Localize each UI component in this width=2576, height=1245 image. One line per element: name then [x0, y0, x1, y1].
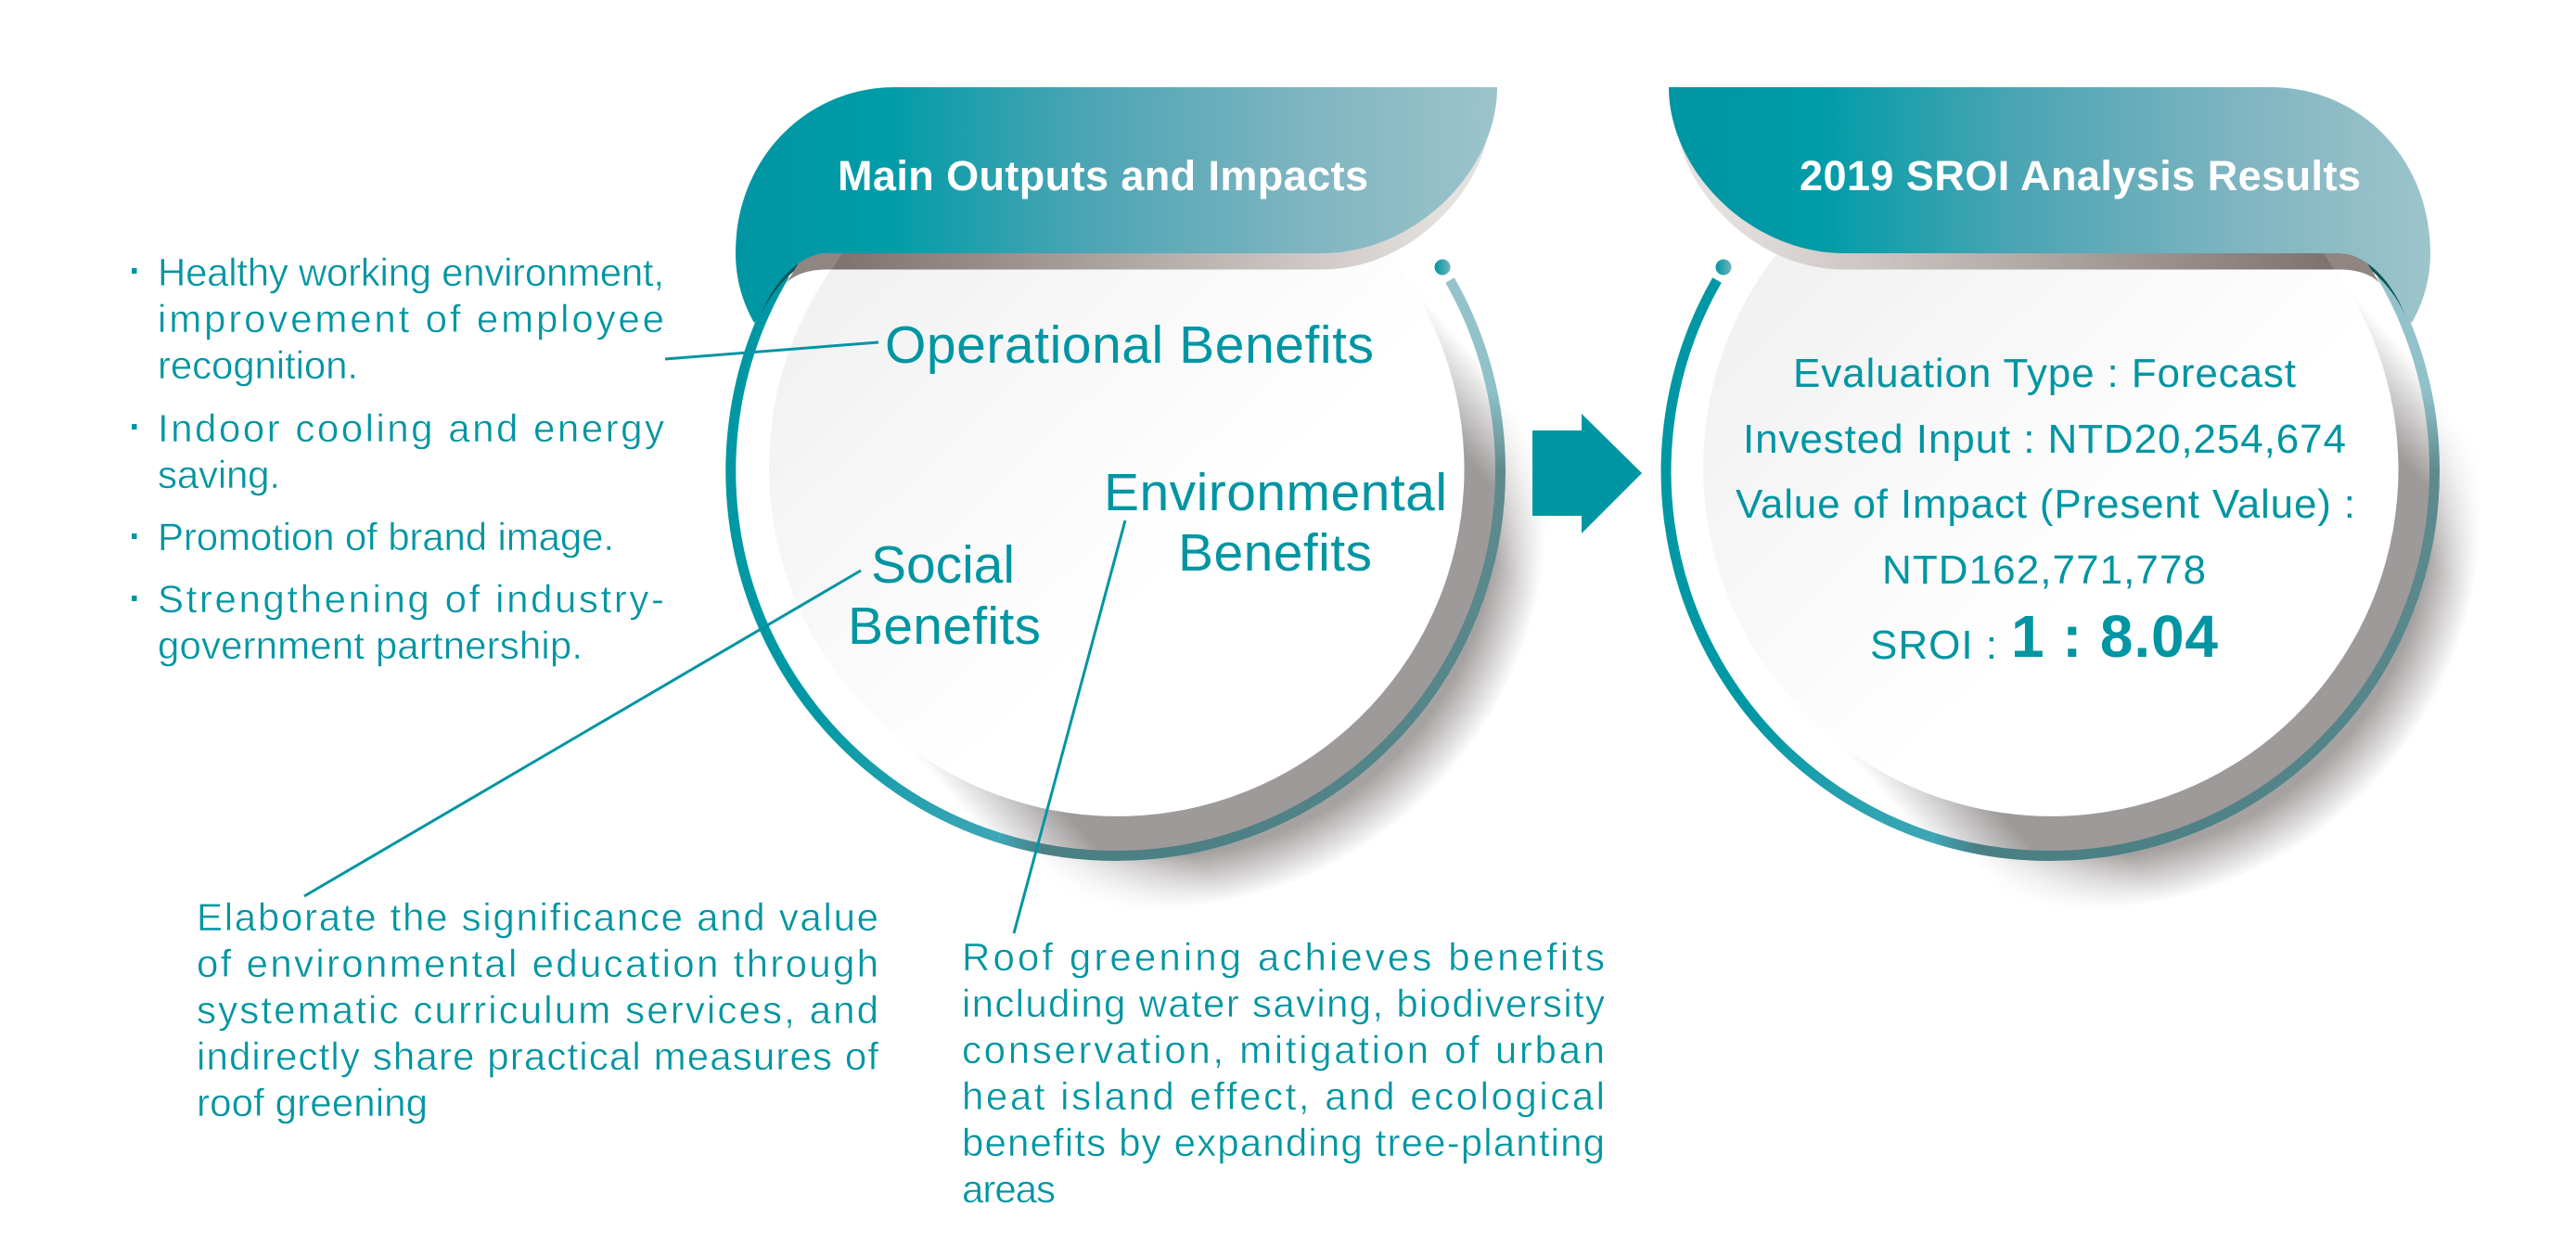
white disc	[1703, 121, 2397, 815]
bullets	[132, 268, 137, 601]
heading: operational benefits: Operational Benefits	[885, 315, 1374, 375]
text block: social benefits description: Elaborate the significance and value	[197, 895, 878, 939]
banner title: 2019 SROI Analysis Results	[1800, 152, 2361, 199]
banner	[1669, 87, 2430, 323]
text block: operational benefits list: recognition.	[158, 343, 358, 387]
text block: environmental benefits description: benefits by expanding tree-planting	[962, 1121, 1605, 1164]
text block: environmental benefits description: areas	[962, 1167, 1056, 1211]
leader line: operational benefits	[665, 342, 878, 359]
ring end dot	[1716, 260, 1731, 275]
banner title: Main Outputs and Impacts	[838, 152, 1368, 199]
results text: SROI :	[1870, 622, 1997, 668]
panel: 2019 SROI analysis results	[1660, 82, 2481, 909]
heading: social benefits: Benefits	[848, 597, 1041, 656]
text block: operational benefits list: Healthy working environment,	[158, 250, 664, 294]
heading: environmental benefits: Environmental	[1104, 463, 1447, 522]
ring	[731, 275, 1501, 856]
panel: main outputs and impacts	[726, 82, 1547, 909]
text block: social benefits description: indirectly share practical measures of	[197, 1034, 878, 1078]
ring end dot	[1434, 260, 1451, 275]
results text: NTD162,771,778	[1882, 547, 2206, 593]
leader line: environmental benefits	[1014, 520, 1125, 933]
text block: operational benefits list: Strengthening of industry-	[158, 577, 664, 621]
text block: social benefits description: roof greening	[197, 1081, 428, 1124]
heading: social benefits	[848, 535, 1041, 656]
ring	[1666, 275, 2435, 856]
white disc	[769, 121, 1463, 815]
banner shadow	[761, 139, 1487, 315]
text block: environmental benefits description: conservation, mitigation of urban	[962, 1028, 1605, 1072]
text block: operational benefits list: Indoor cooling and energy	[158, 406, 664, 450]
text block: operational benefits list: saving.	[158, 453, 280, 496]
text block: environmental benefits description: heat island effect, and ecological	[962, 1074, 1605, 1118]
text block: social benefits description: systematic curriculum services, and	[197, 988, 878, 1032]
heading: social benefits: Social	[871, 535, 1015, 595]
text block: operational benefits list: improvement of employee	[158, 297, 664, 340]
arrow	[1532, 414, 1642, 533]
text block: operational benefits list: Promotion of brand image.	[158, 515, 614, 558]
heading: environmental benefits: Benefits	[1178, 523, 1372, 583]
text block: environmental benefits description	[962, 935, 1605, 1211]
circle shadow	[926, 310, 1540, 902]
circle shadow	[1860, 310, 2473, 902]
leader line: social benefits	[304, 571, 861, 896]
results text: 1 : 8.04	[2011, 603, 2218, 670]
text block: environmental benefits description: Roof greening achieves benefits	[962, 935, 1605, 979]
text block: operational benefits list: government partnership.	[158, 623, 583, 667]
banner	[736, 87, 1497, 323]
results text: Value of Impact (Present Value) :	[1736, 481, 2355, 527]
text block: operational benefits list	[132, 250, 664, 667]
results text: Invested Input : NTD20,254,674	[1743, 417, 2346, 462]
text block: social benefits description	[197, 895, 878, 1124]
text block: social benefits description: of environmental education through	[197, 942, 878, 985]
text block: environmental benefits description: including water saving, biodiversity	[962, 982, 1605, 1025]
heading: environmental benefits	[1104, 463, 1447, 583]
banner shadow	[1679, 139, 2405, 315]
results text	[1736, 351, 2355, 670]
results text: Evaluation Type : Forecast	[1793, 351, 2296, 396]
